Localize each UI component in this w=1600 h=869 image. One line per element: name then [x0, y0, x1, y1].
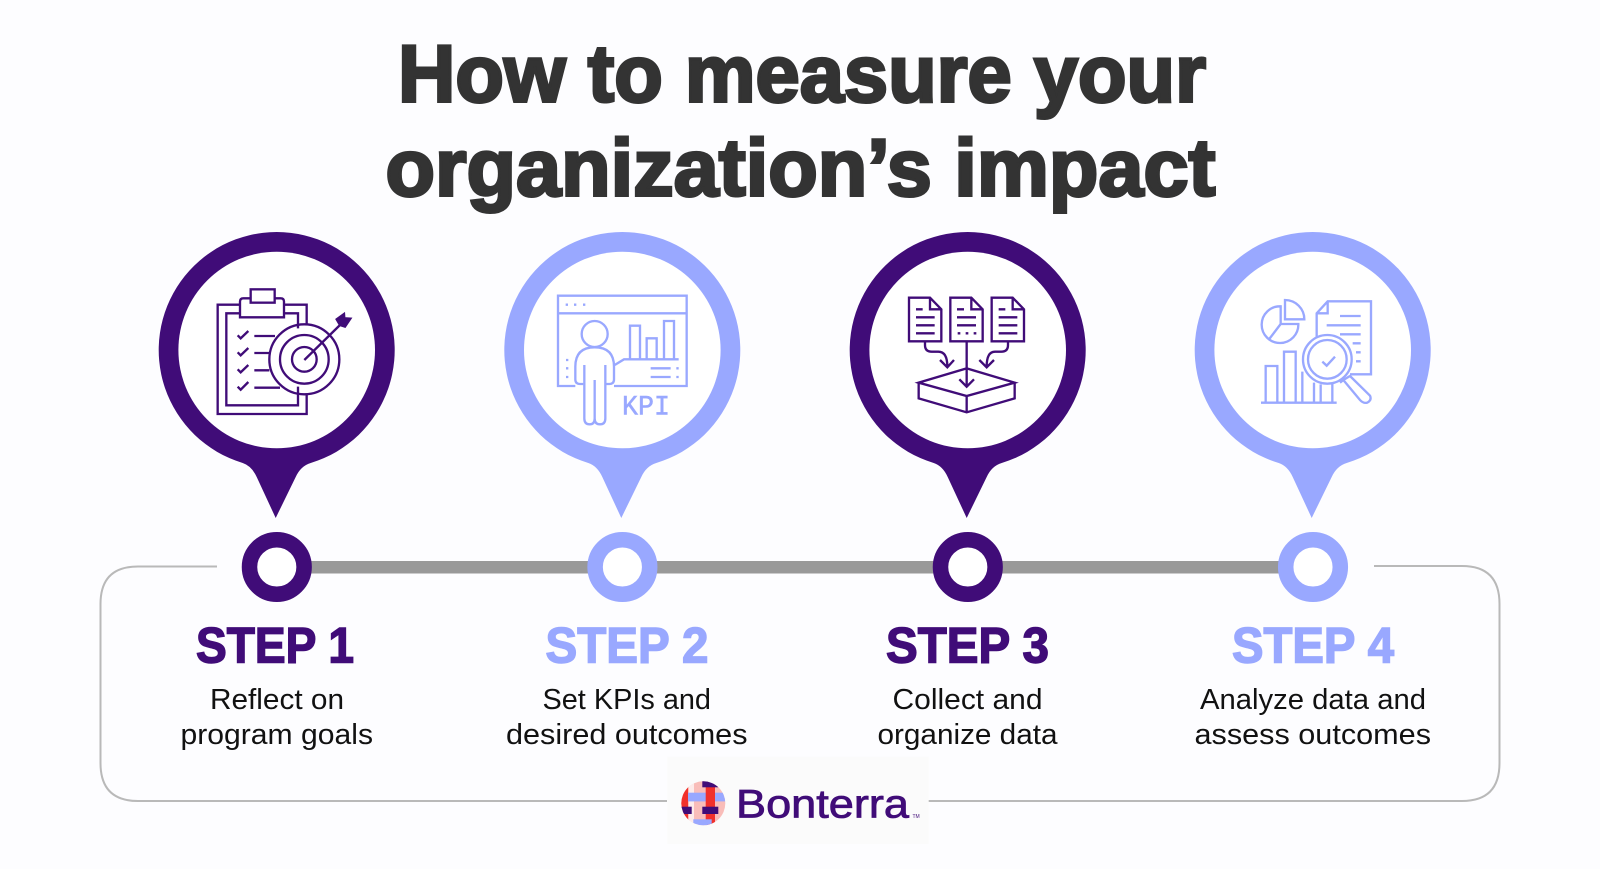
panel: steps outline	[100, 566, 1500, 801]
timeline bar	[300, 561, 1300, 574]
pin: step 1	[159, 232, 395, 518]
marker: step 3	[940, 540, 995, 594]
step 3 text: Collect and	[892, 684, 1042, 716]
title: How to measure your	[398, 30, 1206, 120]
step 1 text	[180, 618, 373, 751]
logo: Bonterra: TM	[912, 814, 920, 820]
step 1 text: program goals	[180, 719, 373, 751]
step 1 text: Reflect on	[210, 684, 344, 716]
step 3 text: organize data	[878, 719, 1058, 751]
pin: step 3	[850, 232, 1086, 518]
logo: Bonterra: Bonterra	[736, 782, 910, 826]
icon: documents into box	[909, 298, 1024, 412]
logo: Bonterra	[681, 781, 929, 826]
step 1 text: STEP 1	[196, 618, 354, 674]
step 2 text: desired outcomes	[506, 719, 748, 751]
title: organization’s impact	[386, 124, 1216, 214]
icon: KPI presenter: KPI	[622, 392, 670, 423]
step 4 text	[1194, 618, 1431, 751]
icon: charts and magnifier	[1261, 300, 1371, 403]
step 2 text	[506, 618, 748, 751]
pin: step 2	[504, 232, 740, 518]
step 4 text: assess outcomes	[1194, 719, 1431, 751]
step 3 text	[878, 618, 1058, 751]
icon: KPI presenter	[558, 296, 687, 424]
icon: woven globe	[681, 781, 726, 826]
pin: step 4	[1195, 232, 1431, 518]
step 2 text: Set KPIs and	[542, 684, 711, 716]
step 4 text: Analyze data and	[1200, 684, 1426, 716]
step 2 text: STEP 2	[546, 618, 708, 674]
marker: step 4	[1286, 540, 1340, 594]
icon: clipboard and target	[218, 289, 350, 414]
step 3 text: STEP 3	[886, 618, 1049, 674]
marker: step 1	[249, 540, 304, 594]
marker: step 2	[595, 540, 650, 594]
title	[386, 30, 1216, 214]
step 4 text: STEP 4	[1232, 618, 1394, 674]
